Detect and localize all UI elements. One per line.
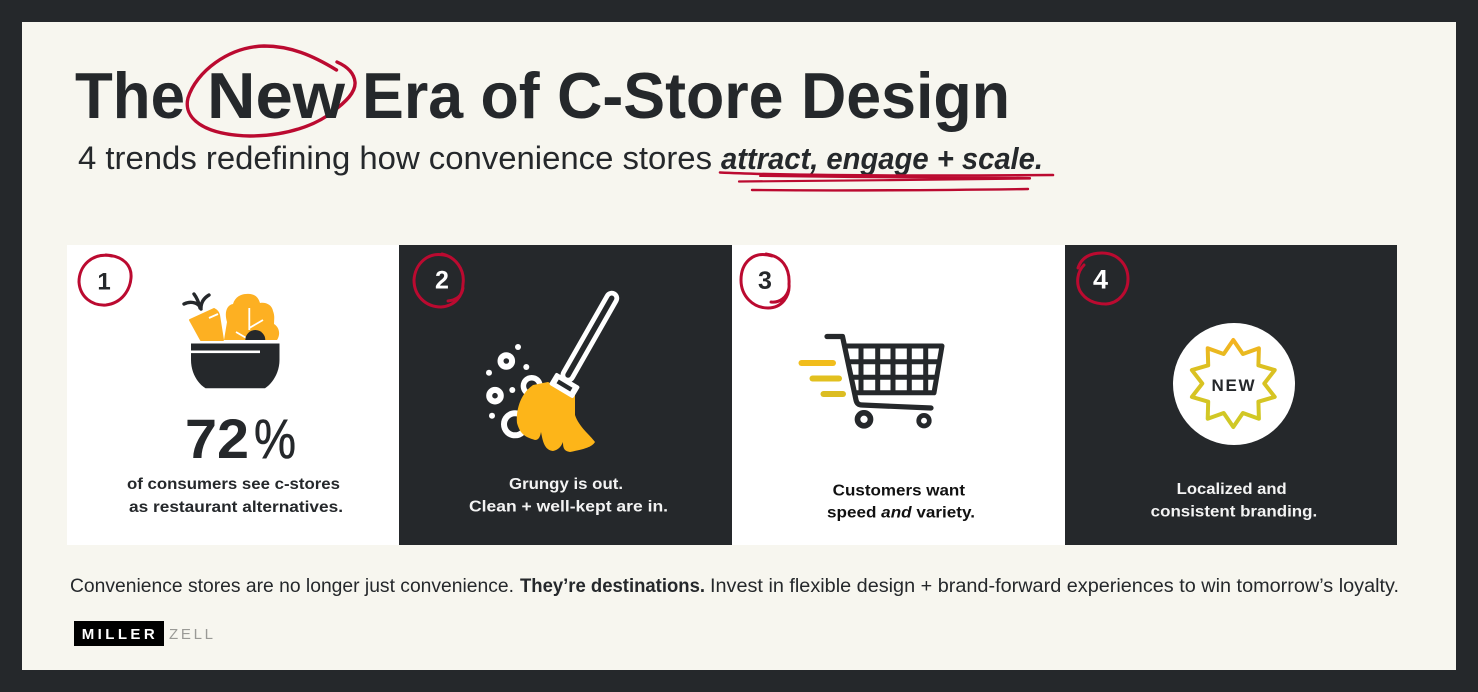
title: New (207, 59, 345, 132)
card 2 text (469, 476, 668, 516)
subtitle (78, 140, 1043, 176)
logo: Miller Zell: MILLER (82, 626, 155, 643)
footer statement: They’re destinations. (520, 576, 705, 597)
subtitle: 4 trends redefining how convenience stores (78, 140, 712, 176)
card 3 text (827, 483, 975, 522)
logo: Miller Zell (74, 621, 213, 646)
card 1 text (127, 476, 343, 516)
card 3 text: Customers want (833, 483, 966, 500)
subtitle: attract, engage + scale. (721, 142, 1043, 176)
footer statement (70, 576, 1399, 597)
card 4 text: Localized and (1177, 481, 1287, 498)
footer statement: Convenience stores are no longer just convenience. (70, 576, 514, 597)
logo: Miller Zell: ZELL (169, 626, 213, 643)
card 2 text: Grungy is out. (509, 476, 623, 493)
number badge 3 (741, 254, 789, 308)
title: Era of C-Store Design (362, 59, 1010, 132)
icon: shopping cart (827, 336, 942, 426)
icon: speed lines (802, 363, 843, 394)
panel: card 1 (67, 245, 399, 545)
number badge 4: 4 (1093, 264, 1108, 294)
card 4 text: consistent branding. (1151, 504, 1317, 521)
icon: salad bowl (184, 294, 280, 388)
panel: card 3 (732, 245, 1065, 545)
red hand-drawn circle around New (187, 46, 355, 136)
statistic 72% (185, 407, 296, 470)
panel: card 4 (1065, 245, 1397, 545)
title: The (75, 59, 185, 132)
number badge 2: 2 (435, 266, 449, 294)
number badge 2 (414, 254, 463, 307)
card 2 text: Clean + well-kept are in. (469, 499, 668, 516)
card 3 text: speed and variety. (827, 505, 975, 522)
card 1 text: as restaurant alternatives. (129, 499, 343, 516)
card 4 text (1151, 481, 1317, 521)
footer statement: Invest in flexible design + brand-forward experiences to win tomorrow’s loyalty. (710, 576, 1399, 597)
number badge 3: 3 (758, 267, 772, 295)
number badge 1: 1 (97, 268, 111, 296)
card 1 text: of consumers see c-stores (127, 476, 340, 493)
statistic 72%: 72 (185, 407, 249, 470)
statistic 72%: % (254, 407, 296, 470)
icon: broom and dust (486, 298, 612, 452)
panel: card 2 (399, 245, 732, 545)
title (75, 59, 1010, 132)
number badge 4 (1078, 253, 1128, 304)
icon: new badge: NEW (1212, 376, 1255, 395)
icon: new badge (1173, 323, 1295, 445)
number badge 1 (79, 255, 131, 305)
red hand-drawn underlines (720, 172, 1053, 190)
